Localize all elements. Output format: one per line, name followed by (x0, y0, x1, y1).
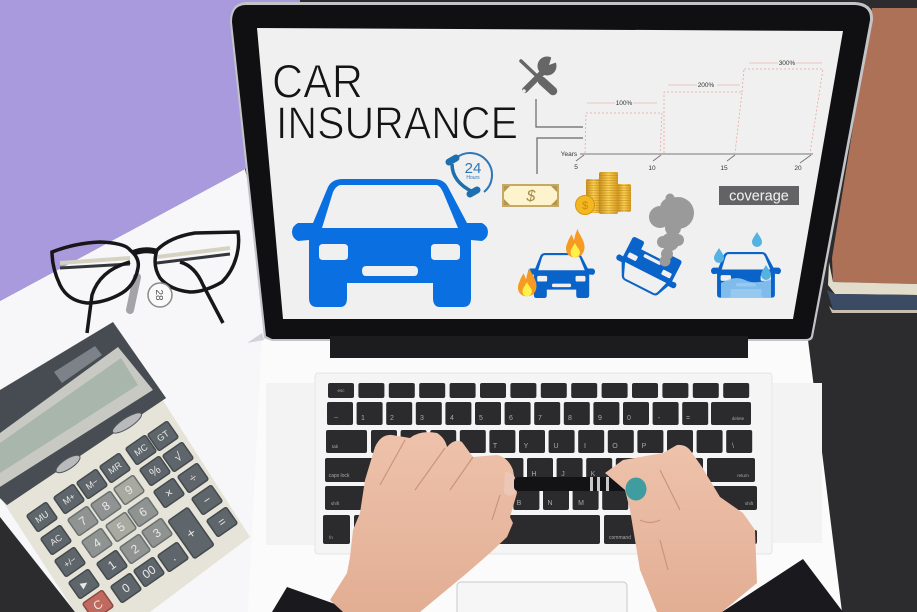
number row: 0 (627, 415, 631, 422)
connector lines (536, 99, 583, 174)
calculator keys: − (200, 492, 214, 508)
title: INSURANCE (276, 98, 518, 148)
calculator sliders (54, 410, 144, 476)
icon: flooded car (711, 232, 781, 298)
icon: 24 hours phone: Hours (466, 175, 480, 181)
screen bezel (232, 5, 870, 339)
keyboard (323, 383, 757, 544)
qwerty row: tab (332, 444, 339, 449)
glasses tag (148, 283, 172, 307)
calculator keys: 9 (122, 482, 136, 498)
percentage label rules (587, 63, 822, 103)
number row (327, 402, 751, 425)
icon: banknote (503, 185, 558, 206)
number row: - (658, 415, 661, 422)
left hand (330, 432, 517, 612)
calculator keys: . (168, 550, 178, 564)
qwerty row: U (553, 443, 559, 450)
glasses (52, 232, 239, 333)
chart labels (561, 60, 802, 172)
right sleeve (722, 559, 843, 612)
modifier and space row: command (609, 535, 631, 541)
coverage label (719, 186, 799, 205)
icon: 24 hours phone (449, 153, 492, 194)
calculator head (0, 322, 166, 505)
calculator keys: 4 (90, 535, 104, 551)
number row: = (686, 415, 690, 422)
screen (257, 28, 843, 319)
home row: H (531, 471, 537, 478)
bottom letter row: N (547, 500, 553, 507)
chart labels: 20 (794, 165, 802, 172)
speaker grille right (773, 383, 822, 543)
calculator keys: +/− (62, 554, 78, 570)
left lens (52, 242, 138, 303)
calculator keys: ▶ (78, 578, 90, 590)
calculator keys: + (183, 524, 199, 542)
calculator display bezel (0, 347, 153, 487)
pen (514, 477, 630, 491)
dark band (0, 390, 166, 505)
chart labels: 300% (779, 60, 796, 67)
calculator keys: AC (48, 532, 64, 548)
small lid shadow (247, 333, 264, 343)
number row: 5 (479, 415, 483, 422)
bottom letter row: shift (745, 501, 754, 506)
qwerty row: \ (732, 443, 734, 450)
temple arms (87, 262, 130, 333)
calculator keys: = (215, 514, 229, 530)
modifier and space row: fn (329, 535, 333, 540)
calculator keys: MC (132, 442, 150, 458)
number row: 8 (568, 415, 572, 422)
icon: overturned car with smoke (608, 194, 694, 303)
home row: J (561, 471, 565, 478)
tag strap (130, 277, 137, 310)
coverage label: coverage (729, 188, 789, 204)
teal nail (626, 478, 646, 500)
calculator keys: 0 (119, 580, 133, 596)
number row: 2 (390, 415, 394, 422)
right lens (155, 232, 239, 292)
number row: 3 (420, 415, 424, 422)
modifier and space row (323, 515, 757, 544)
dashed steps (585, 69, 823, 153)
calculator keys: 8 (99, 498, 113, 514)
bottom letter row: B (517, 500, 522, 507)
calculator keys: 5 (114, 519, 128, 535)
chart labels: 15 (720, 165, 728, 172)
calculator keys: 3 (150, 525, 164, 541)
glasses tag: 28 (153, 289, 164, 301)
calculator (0, 322, 250, 612)
chart labels: 100% (616, 100, 633, 107)
laptop base (248, 340, 842, 612)
function row (328, 383, 749, 398)
calculator keys: 7 (76, 513, 90, 529)
chart labels: 200% (698, 82, 715, 89)
qwerty row: P (642, 443, 647, 450)
chart: coverage steps (561, 60, 823, 172)
icon: 24 hours phone: 24 (465, 160, 481, 177)
calculator keys: × (162, 485, 176, 501)
icon: tools (521, 52, 563, 93)
notebook (827, 8, 917, 313)
title: CAR (272, 54, 363, 108)
bottom letter row: shift (331, 501, 340, 506)
home row: return (737, 473, 749, 478)
bridge (133, 250, 158, 253)
qwerty row: T (493, 443, 498, 450)
white paper sheet (0, 169, 275, 612)
number row: 6 (509, 415, 513, 422)
number row: ~ (334, 415, 338, 422)
chart labels: 5 (574, 164, 578, 171)
purple wall panel (0, 0, 300, 301)
calculator keys: MR (106, 460, 124, 476)
hinge (330, 336, 748, 358)
number row: 1 (361, 415, 365, 422)
title (272, 54, 518, 148)
keyboard well (315, 373, 772, 554)
trackpad (457, 582, 627, 612)
home row: caps lock (329, 473, 350, 479)
calculator screen (0, 358, 138, 473)
calculator keys: MU (33, 509, 51, 525)
function row: esc (337, 388, 345, 393)
calculator keys: GT (155, 428, 171, 444)
number row: 4 (450, 415, 454, 422)
bottom letter row: M (578, 500, 584, 507)
bottom letter row (325, 486, 757, 510)
calculator keys: √ (171, 449, 185, 465)
qwerty row (326, 430, 752, 453)
qwerty row: I (584, 443, 586, 450)
calculator keys (26, 421, 238, 612)
icon: large blue car (292, 179, 488, 307)
chart axis (576, 154, 813, 163)
icon: car on fire (518, 229, 595, 298)
qwerty row: O (612, 443, 618, 450)
laptop lid (230, 2, 873, 341)
icon: gold coins (576, 172, 631, 214)
calculator keys: ÷ (186, 470, 200, 486)
qwerty row: Y (524, 443, 529, 450)
home row: K (591, 471, 596, 478)
calculator keys: M+ (61, 491, 77, 507)
icon: banknote: $ (526, 188, 537, 205)
speaker grille left (266, 383, 314, 545)
home row (325, 458, 755, 482)
calculator keys: 6 (136, 504, 150, 520)
calculator keys: M− (84, 476, 100, 492)
number row: 7 (538, 415, 542, 422)
left sleeve (272, 587, 345, 612)
calculator keys: 2 (128, 541, 142, 557)
calculator keys: 00 (140, 562, 159, 582)
chart labels: Years (561, 151, 578, 158)
solar panel (54, 346, 102, 383)
number row: delete (732, 416, 745, 421)
number row: 9 (598, 415, 602, 422)
calculator keys: % (147, 462, 164, 480)
calculator keys: 1 (105, 557, 119, 573)
icon: gold coins: $ (582, 200, 588, 212)
pen seen through lenses (60, 248, 230, 263)
chart labels: 10 (648, 165, 656, 172)
right hand (605, 445, 757, 612)
